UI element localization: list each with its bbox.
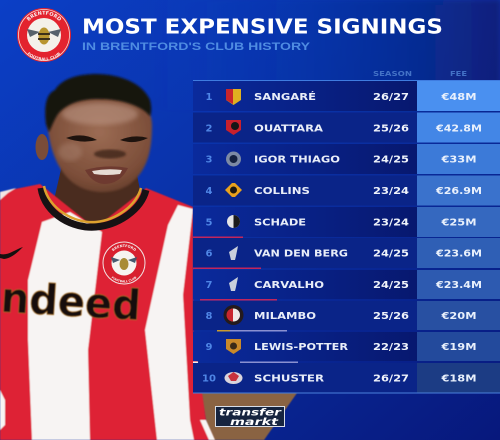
player arm — [200, 393, 297, 440]
row 9: €19M — [440, 342, 477, 353]
ear — [36, 134, 48, 160]
row 8: MILAMBO — [254, 311, 316, 322]
row 10: 26/27 — [373, 374, 409, 384]
row 8: €20M — [440, 311, 477, 322]
club crest — [17, 8, 71, 62]
player neck — [54, 165, 142, 228]
table — [193, 80, 500, 394]
shirt maker logo — [0, 247, 23, 259]
row 3: 24/25 — [373, 154, 409, 166]
row 9: 9 — [206, 342, 213, 353]
cheek highlight — [58, 143, 82, 161]
row 2: 25/26 — [373, 124, 409, 134]
row 4: 4 — [206, 186, 213, 197]
row 4: COLLINS — [254, 186, 310, 197]
mouth — [85, 166, 128, 184]
row 7 — [193, 270, 500, 299]
row 1: SANGARÉ — [254, 90, 316, 103]
row 6 — [193, 238, 500, 268]
row accent lines — [193, 236, 298, 363]
row 8: 25/26 — [373, 311, 409, 322]
shirt crest: FOOTBALL CLUB — [112, 276, 136, 282]
player head — [36, 74, 152, 192]
column header: fee: FEE — [450, 70, 467, 78]
row 2: €42.8M — [435, 124, 482, 134]
club crest: FOOTBALL CLUB — [28, 52, 60, 60]
row 4 — [193, 176, 500, 206]
row 10 — [193, 363, 500, 393]
row 2: 2 — [206, 124, 213, 134]
player shirt — [0, 184, 215, 440]
row 10: €18M — [440, 374, 477, 384]
row 5: 5 — [206, 218, 213, 228]
row 2: OUATTARA — [254, 124, 323, 134]
shirt collar — [41, 186, 146, 227]
hair — [45, 74, 151, 132]
row 4: €26.9M — [435, 186, 482, 197]
row 8: 8 — [206, 311, 213, 322]
transfermarkt logo: markt — [230, 417, 279, 428]
row 5: €25M — [440, 218, 477, 228]
row 3: €33M — [440, 154, 477, 166]
shirt crest — [102, 242, 146, 284]
row 6: €23.6M — [435, 248, 482, 260]
player photo — [0, 72, 298, 440]
row 8 — [193, 301, 500, 330]
transfermarkt logo: transfer — [219, 408, 283, 418]
row 7: CARVALHO — [254, 280, 324, 291]
row 4: 23/24 — [373, 186, 409, 197]
column header: season: SEASON — [373, 70, 412, 78]
row 3 — [193, 144, 500, 174]
row 1: 1 — [206, 92, 213, 103]
subtitle: IN BRENTFORD'S CLUB HISTORY — [82, 41, 311, 53]
row 6: 24/25 — [373, 248, 409, 260]
shirt sponsor: ndeed — [0, 273, 142, 330]
table top rule — [193, 80, 500, 82]
row 9: LEWIS-POTTER — [254, 342, 348, 353]
row 9 — [193, 332, 500, 361]
row 1: 26/27 — [373, 92, 409, 103]
row 7: 7 — [206, 280, 213, 291]
shirt crest: BRENTFORD — [112, 244, 136, 252]
table bottom rule — [193, 392, 500, 394]
row 5: 23/24 — [373, 218, 409, 228]
row 2 — [193, 112, 500, 142]
row 7: 24/25 — [373, 280, 409, 291]
forehead highlight — [62, 103, 138, 125]
eyes — [66, 135, 148, 142]
row 5 — [193, 207, 500, 237]
club crest: BRENTFORD — [26, 10, 61, 21]
row 1 — [193, 81, 500, 111]
row 1: €48M — [440, 92, 477, 103]
row 7: €23.4M — [435, 280, 482, 291]
row 10: 10 — [202, 374, 216, 384]
title: MOST EXPENSIVE SIGNINGS — [82, 14, 443, 38]
transfermarkt logo — [216, 406, 284, 428]
row 9: 22/23 — [373, 342, 409, 353]
nose — [94, 150, 126, 158]
row 3: 3 — [206, 154, 213, 166]
face — [47, 92, 152, 192]
row 6: VAN DEN BERG — [254, 248, 348, 260]
row 3: IGOR THIAGO — [254, 154, 340, 166]
row 10: SCHUSTER — [254, 374, 324, 384]
row 6: 6 — [206, 248, 213, 260]
row 5: SCHADE — [254, 218, 306, 228]
